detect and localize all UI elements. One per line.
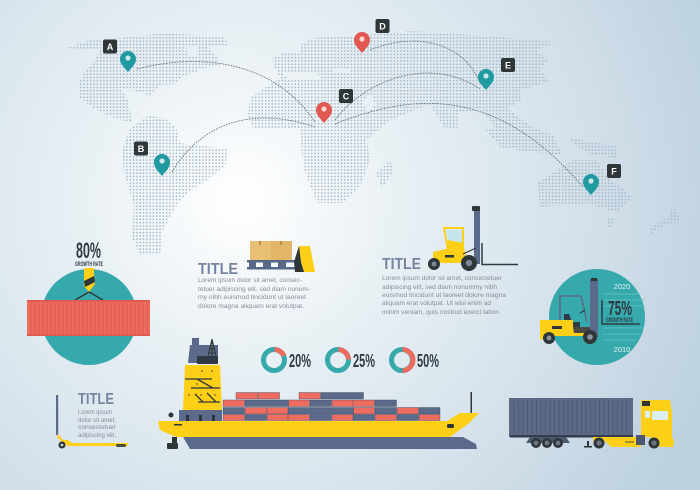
pin A bbox=[103, 40, 136, 72]
superstructure bbox=[179, 338, 222, 421]
text block: title 3: consectetuer bbox=[78, 424, 117, 431]
80% stat: GROWTH RATE bbox=[75, 261, 103, 268]
donut: 20% bbox=[264, 350, 311, 371]
text block: title 2: minim veniam, quis nostrud exerci tation bbox=[382, 309, 499, 316]
panel: 80% container bbox=[27, 238, 150, 365]
pallet jack with title bbox=[56, 391, 128, 448]
text block: title 2: TITLE bbox=[382, 256, 421, 273]
containers bbox=[223, 392, 440, 420]
donut: 50% bbox=[392, 350, 439, 371]
container truck bbox=[509, 398, 674, 448]
crane hook bbox=[75, 268, 103, 300]
panel: 75% forklift: 2020 bbox=[614, 282, 630, 291]
text block: title 2: euismod tincidunt ut laoreet dolore magna bbox=[382, 292, 506, 299]
pin A: A bbox=[107, 42, 114, 52]
text block: title 1 bbox=[198, 261, 310, 310]
text block: title 2: adipiscing elit, sed diam nonummy nibh bbox=[382, 284, 497, 291]
pin F: F bbox=[611, 166, 617, 176]
text block: title 3: Lorem ipsum bbox=[78, 409, 112, 416]
text block: title 1: dolore magna aliquam erat volutpat. bbox=[198, 303, 304, 310]
pin C: C bbox=[343, 92, 350, 102]
donut: 25%: 25% bbox=[353, 351, 375, 371]
pin D bbox=[354, 19, 390, 53]
text block: title 3 bbox=[78, 391, 117, 439]
75% stat: 75% bbox=[608, 298, 632, 320]
text block: title 3: TITLE bbox=[78, 391, 114, 408]
panel: 75% forklift: 2010 bbox=[614, 345, 630, 354]
80% stat: 80% bbox=[76, 238, 101, 263]
pin C bbox=[316, 89, 353, 123]
text block: title 1: TITLE bbox=[198, 261, 238, 278]
panel: 75% forklift bbox=[540, 269, 645, 365]
75% stat bbox=[606, 298, 633, 324]
text block: title 1: tetuer adipiscing elit, sed diam nonum- bbox=[198, 286, 310, 293]
red container bbox=[27, 300, 150, 336]
container ship bbox=[158, 338, 479, 449]
donut: 50%: 50% bbox=[417, 351, 439, 371]
pin E bbox=[478, 58, 515, 90]
text block: title 2 bbox=[382, 256, 506, 316]
pin B bbox=[134, 142, 170, 176]
donut: 25% bbox=[328, 350, 375, 371]
text block: title 3: dolor sit amet, bbox=[78, 417, 116, 424]
world map bbox=[67, 31, 682, 255]
route lines bbox=[137, 41, 583, 187]
icon: pallet with boxes and wet floor sign bbox=[247, 241, 315, 272]
hull bbox=[158, 392, 479, 449]
text block: title 1: my nibh euismod tincidunt ut laoreet bbox=[198, 294, 306, 301]
pin B: B bbox=[138, 144, 145, 154]
text block: title 3: adipiscing elit, bbox=[78, 432, 116, 439]
donut: 20%: 20% bbox=[289, 351, 311, 371]
text block: title 1: Lorem ipsum dolor sit amet, consec- bbox=[198, 277, 302, 284]
pin D: D bbox=[379, 22, 386, 32]
icon: yellow forklift bbox=[428, 206, 518, 271]
forklift bbox=[540, 278, 640, 344]
pin F bbox=[583, 164, 621, 195]
80% stat bbox=[75, 238, 103, 268]
text block: title 2: aliquam erat volutpat. Ut wisi enim ad bbox=[382, 300, 491, 307]
text block: title 2: Lorem ipsum dolor sit amet, consectetuer bbox=[382, 275, 503, 282]
pin E: E bbox=[505, 60, 511, 70]
75% stat: GROWTH RATE bbox=[606, 318, 633, 324]
